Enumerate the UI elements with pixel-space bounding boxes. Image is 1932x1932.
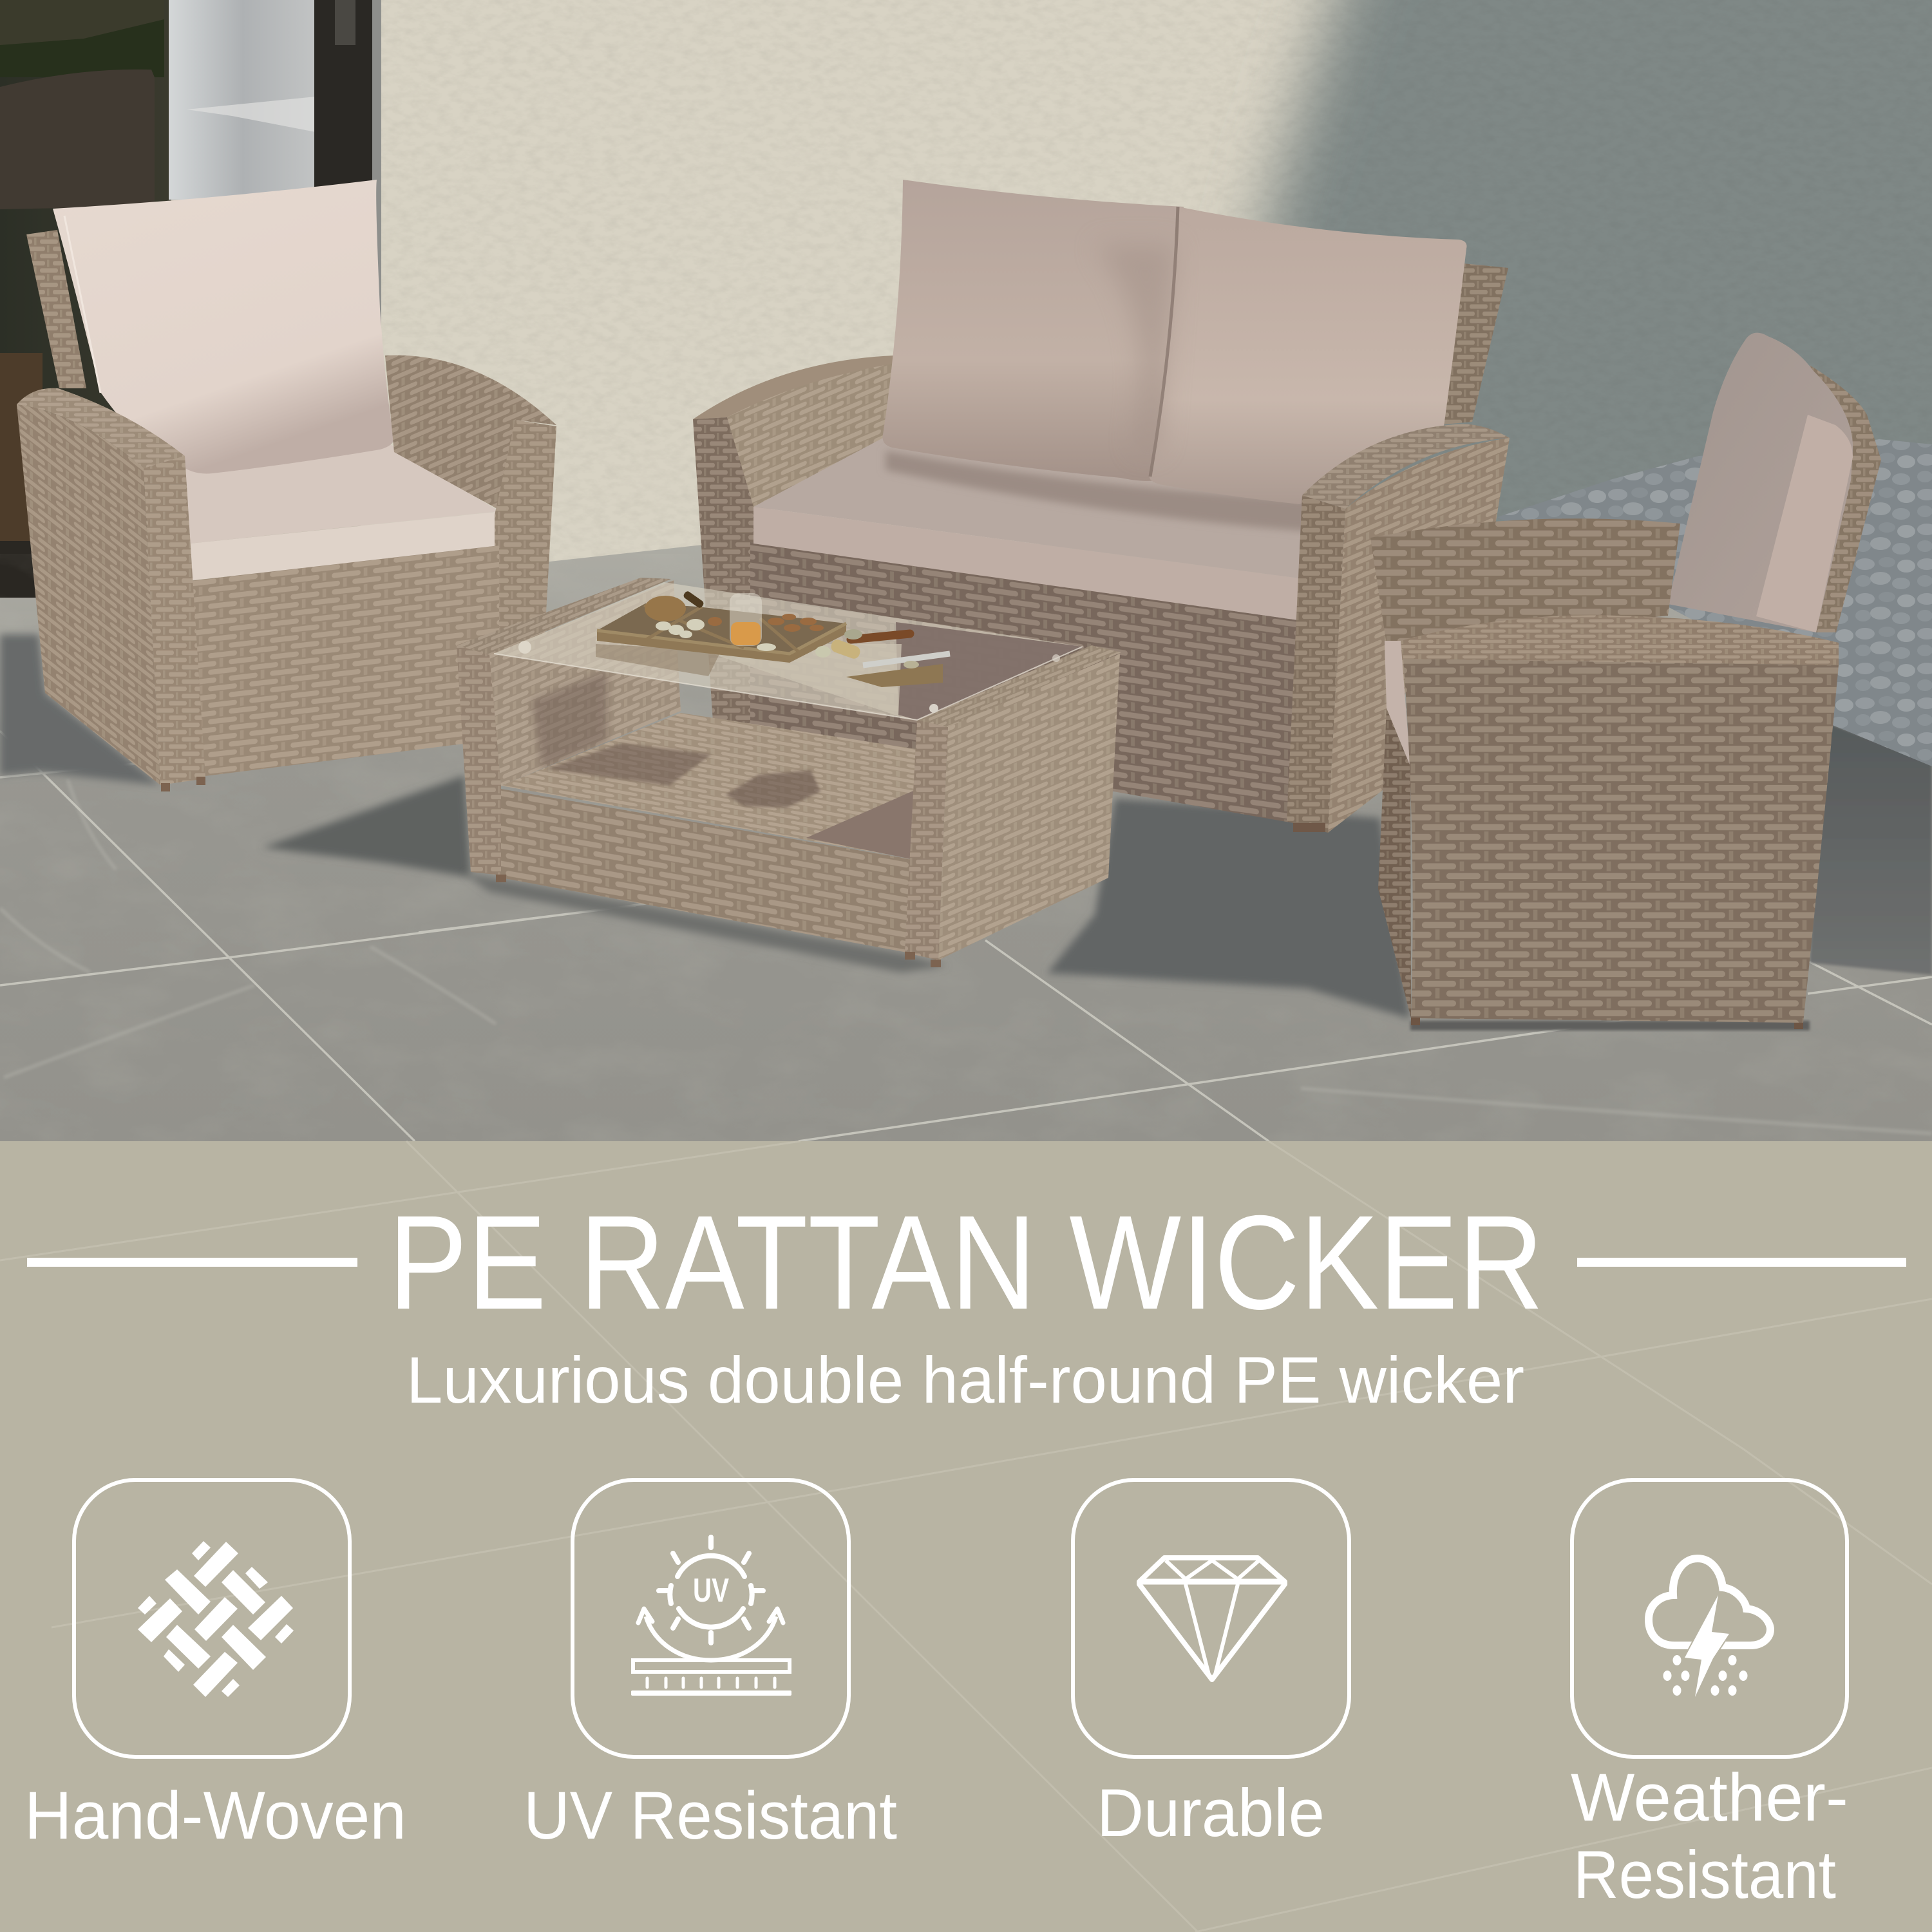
label — [1571, 1760, 1848, 1913]
sofa right back cushion — [1095, 207, 1467, 504]
gravel bed — [1497, 439, 1932, 766]
chair seat cushion — [129, 444, 502, 581]
background wall — [361, 0, 1932, 562]
subtitle: Luxurious double half-round PE wicker — [406, 1343, 1524, 1417]
title rule right — [1577, 1258, 1906, 1267]
chair far arm — [385, 355, 556, 741]
chair back cushion — [53, 180, 394, 473]
title rule left — [27, 1258, 357, 1267]
patio floor tiles — [0, 544, 1932, 1141]
icon frame — [1572, 1480, 1847, 1757]
floor cast shadows — [0, 634, 1932, 1030]
two-seat sofa — [693, 180, 1510, 833]
right armchair — [1370, 333, 1881, 1029]
sofa left back cushion — [883, 180, 1184, 481]
table front rail — [501, 789, 918, 954]
chair near arm front — [1401, 615, 1839, 1029]
icon: uv sun over material — [631, 1537, 791, 1696]
sofa left arm — [693, 355, 894, 734]
chair back frame — [26, 230, 86, 388]
icon frame — [573, 1480, 849, 1757]
feature: durable — [1073, 1480, 1349, 1851]
chair near arm — [17, 388, 205, 791]
drinking glass — [730, 593, 762, 646]
label: Resistant — [1573, 1837, 1836, 1913]
coffee table — [457, 578, 1121, 967]
icon: uv sun over material: UV — [693, 1572, 729, 1609]
beige information panel — [0, 1141, 1932, 1932]
title: PE RATTAN WICKER — [388, 1188, 1544, 1338]
chair back cushion — [1668, 333, 1853, 632]
feature: weather-resistant — [1571, 1480, 1848, 1913]
table back arm — [457, 578, 681, 875]
photo: patio scene with wicker furniture — [0, 0, 1932, 1141]
corkscrew, corks and board — [815, 629, 950, 687]
sofa base front — [750, 542, 1307, 824]
table near arm — [496, 645, 1121, 967]
feature: hand-woven — [24, 1480, 406, 1853]
icon: woven strands — [138, 1541, 294, 1697]
chair base front — [190, 545, 499, 776]
label: Hand-Woven — [24, 1778, 406, 1853]
label: Weather- — [1571, 1760, 1848, 1835]
glass table top — [494, 582, 1083, 720]
feature: uv resistant — [524, 1480, 897, 1853]
icon frame — [74, 1480, 350, 1757]
serving tray with snacks — [597, 590, 846, 663]
icon: diamond — [1139, 1558, 1285, 1680]
sliding door and window — [0, 0, 381, 599]
chair back frame — [1810, 365, 1881, 632]
sofa right arm — [1287, 424, 1510, 833]
left armchair — [17, 180, 556, 791]
sofa seat cushion — [753, 438, 1320, 621]
chair side panel — [1378, 641, 1411, 1018]
icon frame — [1073, 1480, 1349, 1757]
icon: storm cloud — [1649, 1558, 1770, 1697]
chair far arm — [1370, 518, 1680, 644]
sofa back frame — [1443, 263, 1508, 424]
label: Durable — [1097, 1776, 1325, 1851]
label: UV Resistant — [524, 1778, 897, 1853]
table shelf — [501, 713, 924, 860]
